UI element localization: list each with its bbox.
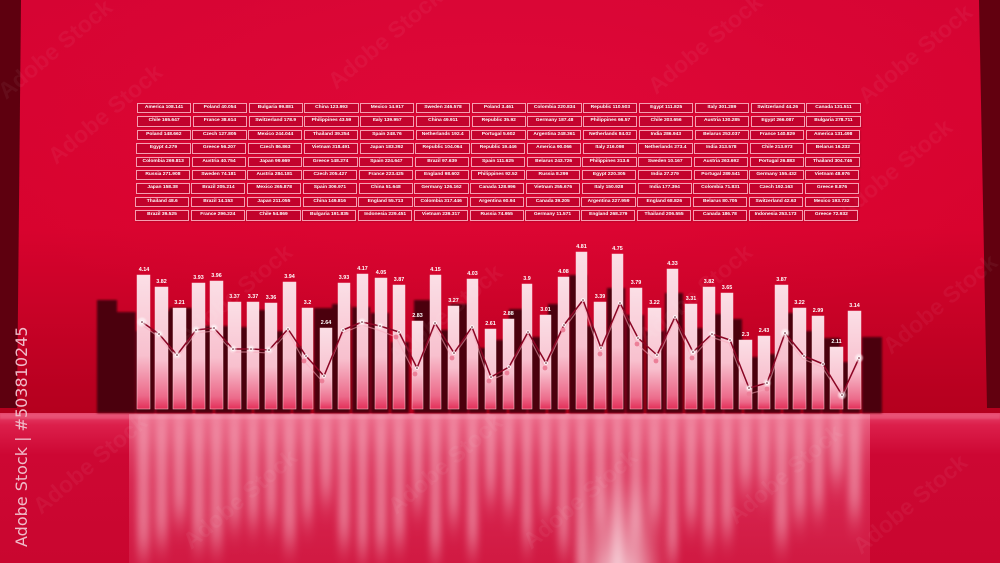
right dark wall band bbox=[979, 0, 1000, 408]
data table: Egypt 4.279 bbox=[150, 145, 177, 150]
data table: Thailand 48.6 bbox=[147, 199, 178, 204]
trend line bbox=[142, 300, 859, 395]
data table: Egypt 266.087 bbox=[761, 118, 794, 123]
data table: Germany 126.162 bbox=[421, 185, 462, 190]
data table bbox=[135, 103, 862, 222]
data table: Italy 301.289 bbox=[707, 105, 736, 110]
data table: Egypt 111.825 bbox=[650, 105, 682, 110]
data table: America 108.141 bbox=[145, 105, 183, 110]
bar value labels: 2.64 bbox=[321, 320, 331, 326]
data table: Bulgaria 278.711 bbox=[814, 118, 853, 123]
watermark pattern: Adobe Stock bbox=[178, 444, 302, 554]
data table: Poland 3.461 bbox=[484, 105, 514, 110]
data table: Austria 263.692 bbox=[703, 159, 739, 164]
data table: China 149.816 bbox=[313, 199, 346, 204]
data table: Belarus 243.726 bbox=[535, 159, 572, 164]
data table: Japan 183.392 bbox=[370, 145, 403, 150]
data table: Brazil 14.153 bbox=[203, 199, 233, 204]
left dark wall band bbox=[0, 0, 21, 408]
data table: India 313.578 bbox=[706, 145, 737, 150]
data table: Mexico 244.044 bbox=[258, 132, 293, 137]
data table: Canada 131.511 bbox=[815, 105, 852, 110]
data table: Germany 187.48 bbox=[536, 118, 573, 123]
floor reflection of bars bbox=[129, 413, 870, 563]
data table: Sweden 246.578 bbox=[424, 105, 462, 110]
bars bbox=[137, 252, 861, 409]
data table: Chile 213.973 bbox=[762, 145, 793, 150]
data table: Czech 205.427 bbox=[314, 172, 347, 177]
data table: Netherlands 273.4 bbox=[645, 145, 686, 150]
bar value labels: 2.88 bbox=[503, 311, 514, 317]
data table: Brazil 97.639 bbox=[427, 159, 457, 164]
data table: Austria 130.285 bbox=[704, 118, 740, 123]
data table: Canada 186.78 bbox=[703, 212, 737, 217]
bar value labels: 3.22 bbox=[649, 300, 660, 306]
data table: Belarus 80.705 bbox=[703, 199, 737, 204]
data table: Netherlands 84.02 bbox=[589, 132, 631, 137]
watermark pattern: Adobe Stock bbox=[43, 59, 167, 169]
data table: Vietnam 239.317 bbox=[422, 212, 460, 217]
data table: Switzerland 44.26 bbox=[757, 105, 798, 110]
data table: Philippines 313.6 bbox=[590, 159, 629, 164]
data table: Austria 40.754 bbox=[202, 159, 236, 164]
data table: Canada 39.205 bbox=[536, 199, 570, 204]
bar value labels: 2.43 bbox=[759, 328, 769, 334]
data table: Greece 148.274 bbox=[313, 159, 348, 164]
data table: Czech 86.863 bbox=[260, 145, 290, 150]
bar value labels: 2.99 bbox=[813, 308, 823, 314]
data table: Republic 110.503 bbox=[591, 105, 630, 110]
data table: Brazil 205.214 bbox=[202, 185, 235, 190]
data table: Italy 150.928 bbox=[594, 185, 623, 190]
bar value labels: 4.15 bbox=[430, 267, 441, 273]
data table: Italy 139.957 bbox=[373, 118, 402, 123]
data table: Thailand 304.746 bbox=[813, 159, 852, 164]
bar value labels: 3.65 bbox=[722, 285, 732, 291]
data table: China 51.648 bbox=[371, 185, 401, 190]
data table: Argentina 248.361 bbox=[533, 132, 575, 137]
data table: Greece 8.876 bbox=[817, 185, 847, 190]
data table: Sweden 10.167 bbox=[648, 159, 683, 164]
data table: Greece 56.207 bbox=[203, 145, 236, 150]
data table: Sweden 74.181 bbox=[201, 172, 236, 177]
data table: Greece 72.932 bbox=[815, 212, 848, 217]
data table: Indonesia 229.451 bbox=[364, 212, 406, 217]
bar value labels: 3.37 bbox=[229, 294, 240, 300]
data table: Vietnam 318.491 bbox=[312, 145, 350, 150]
data table: Vietnam 48.976 bbox=[815, 172, 850, 177]
bar value labels: 3.37 bbox=[248, 294, 258, 300]
data table: Bulgaria 191.835 bbox=[310, 212, 349, 217]
watermark pattern: Adobe Stock bbox=[28, 409, 152, 519]
data table: Russia 8.299 bbox=[539, 172, 568, 177]
data table: Poland 40.054 bbox=[204, 105, 236, 110]
bar value labels: 3.96 bbox=[211, 273, 222, 279]
data table: Philippines 43.59 bbox=[312, 118, 351, 123]
watermark pattern: Adobe Stock bbox=[383, 409, 507, 519]
watermark pattern: Adobe Stock bbox=[878, 249, 1000, 359]
data table: Switzerland 42.63 bbox=[756, 199, 796, 204]
data table: Netherlands 192.4 bbox=[422, 132, 464, 137]
data table: Portugal 26.883 bbox=[759, 159, 795, 164]
data table: Austria 284.181 bbox=[257, 172, 292, 177]
watermark pattern: Adobe Stock bbox=[853, 0, 977, 109]
data table: Spain 224.647 bbox=[370, 159, 402, 164]
bar value labels: 3.21 bbox=[174, 300, 185, 306]
data table: England 98.602 bbox=[424, 172, 460, 177]
data table: Colombia 317.446 bbox=[421, 199, 462, 204]
bar value labels: 3.79 bbox=[631, 280, 641, 286]
data table: Russia 271.908 bbox=[145, 172, 180, 177]
data table: Italy 216.098 bbox=[595, 145, 624, 150]
data table: Egypt 220.305 bbox=[593, 172, 625, 177]
data table: Thailand 39.254 bbox=[313, 132, 349, 137]
data table: France 38.614 bbox=[204, 118, 236, 123]
data table: Indonesia 253.173 bbox=[755, 212, 797, 217]
data table: Russia 74.955 bbox=[480, 212, 513, 217]
data table: India 286.943 bbox=[651, 132, 681, 137]
data table: China 123.993 bbox=[315, 105, 348, 110]
stock credit text: Adobe Stock | #503810245 bbox=[12, 326, 31, 547]
data table: Mexico 193.732 bbox=[814, 199, 849, 204]
data table: Czech 127.805 bbox=[203, 132, 236, 137]
bar value labels: 3.31 bbox=[686, 296, 696, 302]
data table: Colombia 220.834 bbox=[534, 105, 575, 110]
bar value labels: 3.82 bbox=[156, 279, 167, 285]
bar value labels: 4.05 bbox=[376, 270, 386, 276]
floor bbox=[0, 413, 1000, 563]
bar value labels: 3.9 bbox=[523, 276, 531, 282]
bar value labels: 4.75 bbox=[612, 246, 623, 252]
bar value labels: 4.08 bbox=[558, 269, 569, 275]
bar value labels: 4.81 bbox=[576, 244, 587, 250]
bright floor edge highlight bbox=[0, 414, 1000, 419]
data table: Japan 158.38 bbox=[147, 185, 178, 190]
data table: Thailand 206.555 bbox=[644, 212, 684, 217]
bar value labels: 3.93 bbox=[339, 275, 349, 281]
point halos bbox=[138, 318, 863, 399]
data table: Bulgaria 99.881 bbox=[258, 105, 294, 110]
watermark pattern: Adobe Stock bbox=[848, 449, 972, 559]
data table: Mexico 265.878 bbox=[256, 185, 292, 190]
bar value labels bbox=[139, 244, 860, 345]
data table: England 55.713 bbox=[368, 199, 403, 204]
bar value labels: 3.82 bbox=[704, 279, 714, 285]
watermark pattern: Adobe Stock bbox=[518, 444, 642, 554]
watermark pattern: Adobe Stock bbox=[173, 239, 297, 349]
data table: Colombia 269.813 bbox=[143, 159, 184, 164]
data table: Argentina 60.94 bbox=[479, 199, 515, 204]
data table: England 68.826 bbox=[647, 199, 682, 204]
data table: Japan 211.055 bbox=[257, 199, 290, 204]
data table: Spain 248.76 bbox=[372, 132, 402, 137]
background wall bbox=[0, 0, 1000, 414]
data table: Republic 35.92 bbox=[482, 118, 516, 123]
data table: America 131.498 bbox=[814, 132, 852, 137]
bar value labels: 4.33 bbox=[667, 261, 678, 267]
data table: Republic 19.446 bbox=[480, 145, 517, 150]
ghost points bbox=[302, 328, 769, 396]
bar value labels: 3.87 bbox=[394, 277, 404, 283]
data table: Spain 111.625 bbox=[482, 159, 514, 164]
watermark pattern: Adobe Stock bbox=[833, 114, 957, 224]
bar value labels: 3.01 bbox=[540, 307, 551, 313]
data table: Japan 99.669 bbox=[260, 159, 290, 164]
data table: Portugal 289.541 bbox=[701, 172, 740, 177]
bar value labels: 3.36 bbox=[266, 295, 276, 301]
data table: Brazil 39.525 bbox=[147, 212, 177, 217]
bar value labels: 2.61 bbox=[485, 321, 496, 327]
data table: India 177.394 bbox=[649, 185, 680, 190]
data table: France 140.829 bbox=[760, 132, 795, 137]
bar value labels: 4.03 bbox=[467, 271, 478, 277]
data table: Belarus 253.037 bbox=[703, 132, 740, 137]
bar value labels: 3.39 bbox=[595, 294, 605, 300]
data table: Colombia 71.831 bbox=[701, 185, 740, 190]
data table: Republic 104.064 bbox=[423, 145, 462, 150]
data table: China 49.911 bbox=[428, 118, 458, 123]
bar value labels: 3.14 bbox=[849, 303, 860, 309]
data table: Argentina 227.959 bbox=[588, 199, 629, 204]
bar value labels: 3.22 bbox=[794, 300, 805, 306]
data table: Germany 11.571 bbox=[534, 212, 571, 217]
wall glow bbox=[0, 0, 1000, 414]
bar value labels: 2.11 bbox=[831, 339, 842, 345]
bar value labels: 3.27 bbox=[448, 298, 459, 304]
data table: Philippines 92.52 bbox=[478, 172, 517, 177]
data table: Spain 306.971 bbox=[314, 185, 346, 190]
data table: Belarus 16.232 bbox=[816, 145, 850, 150]
bar value labels: 3.87 bbox=[776, 277, 787, 283]
line data points bbox=[141, 299, 860, 396]
data table: Mexico 14.917 bbox=[371, 105, 404, 110]
data table: Philippines 66.57 bbox=[590, 118, 630, 123]
watermark pattern: Adobe Stock bbox=[383, 259, 507, 369]
data table: England 268.279 bbox=[589, 212, 627, 217]
data table: America 90.066 bbox=[536, 145, 572, 150]
data table: France 296.224 bbox=[200, 212, 235, 217]
data table: Canada 128.996 bbox=[479, 185, 516, 190]
bar value labels: 2.83 bbox=[412, 313, 423, 319]
data table: Czech 192.163 bbox=[759, 185, 793, 190]
bar shadows on wall bbox=[97, 275, 882, 413]
data table: Portugal 5.602 bbox=[482, 132, 515, 137]
data table: Poland 148.662 bbox=[146, 132, 181, 137]
data table: Chile 203.656 bbox=[651, 118, 682, 123]
data table: Chile 165.647 bbox=[149, 118, 180, 123]
data table: France 223.425 bbox=[368, 172, 404, 177]
data table: Switzerland 178.9 bbox=[255, 118, 296, 123]
data table: Chile 54.869 bbox=[259, 212, 288, 217]
data table: Germany 155.432 bbox=[756, 172, 797, 177]
data table: India 27.279 bbox=[651, 172, 679, 177]
line reflection bbox=[142, 303, 859, 398]
watermark pattern: Adobe Stock bbox=[723, 419, 847, 529]
data table: Vietnam 255.676 bbox=[534, 185, 572, 190]
bar value labels: 4.14 bbox=[139, 267, 149, 273]
bar value labels: 3.93 bbox=[193, 275, 204, 281]
bar value labels: 2.3 bbox=[742, 332, 749, 338]
bar value labels: 3.2 bbox=[304, 300, 311, 306]
bar value labels: 4.17 bbox=[357, 266, 368, 272]
bar value labels: 3.94 bbox=[284, 274, 295, 280]
watermark pattern: Adobe Stock bbox=[633, 239, 757, 349]
